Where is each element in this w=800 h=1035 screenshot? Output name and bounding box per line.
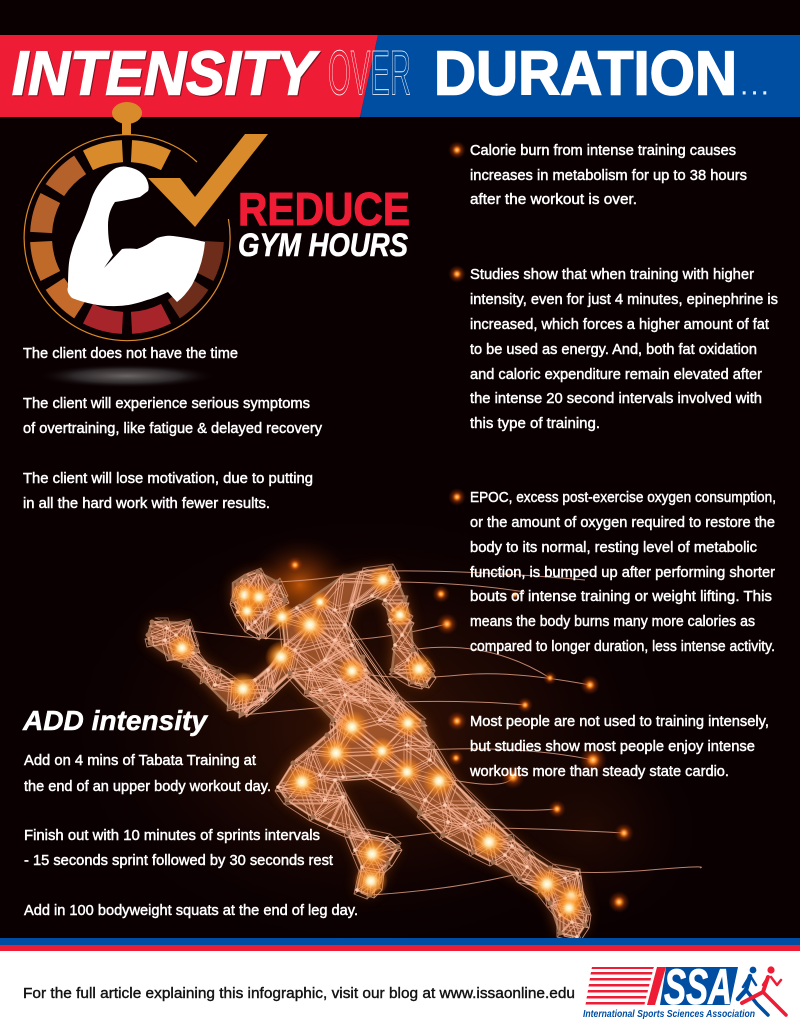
heading: add intensity: ADD intensity [22, 705, 208, 736]
stopwatch segments [8, 118, 246, 356]
title: intensity: INTENSITY [12, 40, 320, 108]
trailing threads [167, 571, 701, 895]
text: EPOC: or the amount of oxygen required to restore the [470, 515, 775, 531]
text: calorie burn [470, 143, 747, 208]
mesh outer nodes [148, 568, 587, 933]
text: calorie burn: after the workout is over. [470, 192, 637, 208]
text: EPOC: means the body burns many more calories as [470, 614, 755, 630]
mesh inner nodes [165, 582, 580, 937]
red banner half [0, 35, 378, 117]
text: add intensity tips: Finish out with 10 minutes of sprints intervals [24, 828, 320, 844]
check mark [148, 134, 268, 227]
text: studies: the intense 20 second intervals involved with [470, 391, 762, 407]
text: reasons to reduce hours: The client will lose motivation, due to putting [23, 471, 313, 487]
blue banner half [360, 35, 800, 117]
illustration: glowing mesh runner [145, 556, 701, 941]
text: studies [470, 267, 778, 432]
header banner: OVER [328, 38, 411, 108]
text: enjoyment: workouts more than steady state cardio. [469, 764, 729, 780]
text: studies: Studies show that when training with higher [470, 267, 754, 283]
text: reasons to reduce hours: of overtraining, like fatigue & delayed recovery [23, 421, 323, 437]
text: add intensity tips [24, 753, 358, 919]
logo: ISSA [583, 959, 786, 1020]
header banner [0, 35, 800, 117]
text: calorie burn: Calorie burn from intense training causes [470, 143, 736, 159]
text: add intensity tips: - 15 seconds sprint followed by 30 seconds rest [24, 853, 333, 869]
floating sparks [286, 556, 634, 913]
text: reasons to reduce hours: in all the hard work with fewer results. [23, 496, 270, 512]
footer text: For the full article explaining this infographic, visit our blog at www.issaonline.edu [23, 985, 575, 1002]
text: studies: increased, which forces a higher amount of fat [470, 317, 769, 333]
text: enjoyment [469, 714, 769, 780]
logo blue runner [738, 967, 768, 1015]
logo block [660, 967, 738, 1005]
icon: stopwatch with flexed arm and check mark [8, 102, 268, 356]
text: calorie burn: increases in metabolism for up to 38 hours [470, 168, 747, 184]
heading: reduce gym hours: GYM HOURS [238, 227, 409, 263]
mesh glow points [167, 565, 586, 923]
heading: reduce gym hours: REDUCE [238, 183, 410, 235]
shadow under text [37, 364, 217, 388]
text: EPOC: compared to longer duration, less intense activity. [470, 639, 775, 655]
text: studies: intensity, even for just 4 minutes, epinephrine is [470, 292, 778, 308]
text: studies: to be used as energy. And, both fat oxidation [470, 342, 757, 358]
mesh lines [145, 564, 591, 941]
logo name: International Sports Sciences Association [583, 1009, 755, 1020]
stopwatch rim [24, 135, 230, 341]
text: enjoyment: Most people are not used to training intensely, [470, 714, 769, 730]
heading: reduce gym hours [238, 183, 410, 263]
runner orange underglow [148, 568, 587, 937]
text: add intensity tips: Add in 100 bodyweight squats at the end of leg day. [24, 903, 358, 919]
text: studies: and caloric expenditure remain elevated after [470, 367, 762, 383]
runner silhouette [148, 568, 587, 937]
text: EPOC: bouts of intense training or weight lifting. This [470, 589, 772, 605]
text: reasons to reduce hours: The client does not have the time [23, 346, 238, 362]
footer band [0, 938, 800, 1035]
title: duration: DURATION [434, 40, 737, 108]
logo red runner [742, 966, 786, 1015]
logo letters: SSA [664, 959, 732, 1015]
text: add intensity tips: the end of an upper body workout day. [24, 779, 271, 795]
bullet dots [447, 141, 467, 731]
text: EPOC: EPOC, excess post-exercise oxygen consumption, [470, 490, 776, 506]
text: studies: this type of training. [470, 416, 600, 432]
text: reasons to reduce hours: The client will experience serious symptoms [23, 396, 310, 412]
flexed arm [68, 167, 205, 306]
text: reasons to reduce hours [23, 346, 323, 512]
text: add intensity tips: Add on 4 mins of Tabata Training at [24, 753, 256, 769]
text: EPOC: function, is bumped up after performing shorter [470, 565, 775, 581]
text: EPOC [470, 490, 776, 655]
text: enjoyment: but studies show most people enjoy intense [470, 739, 755, 755]
stopwatch knob [112, 102, 142, 135]
logo stripes [586, 967, 666, 1005]
title: ellipsis: ... [740, 68, 769, 102]
text: EPOC: body to its normal, resting level of metabolic [470, 540, 757, 556]
